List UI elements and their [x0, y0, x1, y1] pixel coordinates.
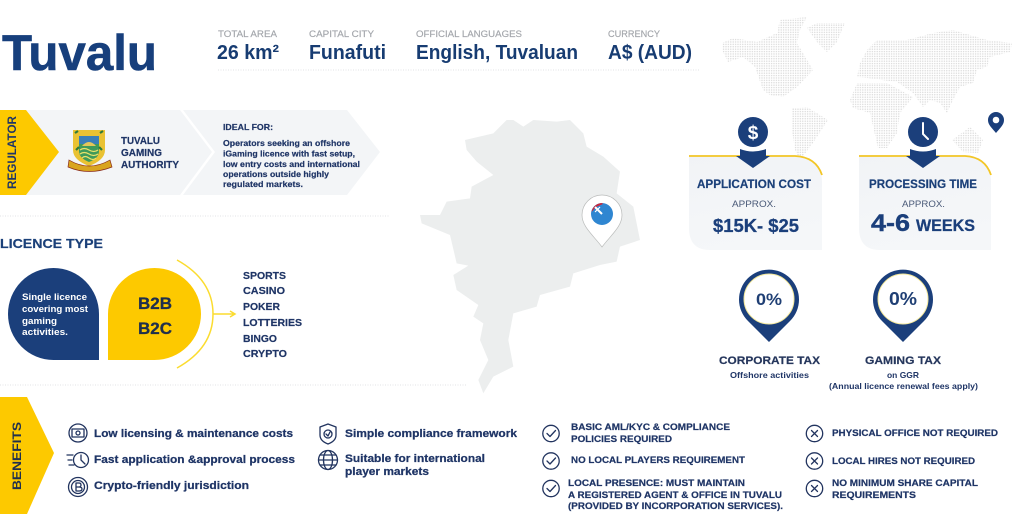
fact: official languages: [416, 29, 578, 64]
rate: 0%: [756, 290, 782, 309]
icon: globe: [318, 450, 338, 470]
approx label: APPROX.: [902, 199, 945, 210]
check icon: [543, 425, 559, 442]
requirement: AML KYC: POLICIES REQUIRED: [571, 434, 672, 445]
B2B B2C label: B2B: [138, 294, 172, 313]
benefit: low costs: Low licensing & maintenance costs: [94, 428, 293, 440]
requirement: local presence: (PROVIDED BY INCORPORATION SERVICES).: [568, 501, 783, 512]
benefit: compliance: Simple compliance framework: [345, 428, 518, 440]
cross icon: [806, 453, 823, 469]
fact: total area: 26 km²: [217, 42, 279, 64]
check icon: [543, 480, 559, 497]
activities list: POKER: [243, 301, 280, 313]
note: [829, 370, 978, 391]
note: on GGR: [887, 370, 919, 380]
benefit: crypto friendly: Crypto-friendly jurisdiction: [94, 480, 249, 492]
teardrop text: gaming: [22, 316, 57, 326]
item: physical office: PHYSICAL OFFICE NOT REQUIRED: [832, 428, 998, 439]
icon: flag map pin: [582, 195, 622, 247]
activities list: SPORTS: [243, 270, 286, 282]
fact: currency: [608, 29, 692, 64]
icon: bitcoin: [68, 478, 88, 496]
time value: WEEKS: [916, 216, 975, 235]
icon: clock: [908, 117, 938, 147]
item: local hires: LOCAL HIRES NOT REQUIRED: [832, 456, 975, 467]
fact: currency: CURRENCY: [608, 29, 660, 39]
activities list: [243, 270, 302, 360]
benefit: fast approval: Fast application &approval process: [94, 454, 295, 466]
requirements: required list: [543, 422, 783, 512]
icon: small location pin: [988, 112, 1004, 133]
ideal for text: low entry costs and international: [223, 159, 360, 169]
note: (Annual licence renewal fees apply): [829, 381, 978, 391]
fact: official languages: English, Tuvaluan: [416, 42, 578, 64]
arrow: down: [906, 149, 940, 168]
requirement: local players: NO LOCAL PLAYERS REQUIREMENT: [571, 455, 745, 466]
requirement: local presence: [568, 478, 783, 512]
ideal for text: regulated markets.: [223, 179, 303, 189]
benefits tab: [0, 397, 54, 514]
rate: 0%: [889, 289, 917, 309]
item: share capital: [832, 478, 978, 501]
card heading: PROCESSING TIME: [869, 179, 977, 191]
icon: Tuvalu coat of arms: [68, 130, 112, 172]
benefit: international markets: player markets: [345, 466, 429, 478]
panel: licence type: [8, 260, 302, 368]
panel: corporate tax: [719, 270, 821, 380]
benefit: international markets: [345, 453, 485, 478]
requirement: local presence: LOCAL PRESENCE: MUST MAINTAIN: [568, 478, 745, 489]
panel: processing time: [859, 117, 991, 250]
heading: licence type: LICENCE TYPE: [0, 236, 103, 251]
heading: GAMING TAX: [865, 355, 942, 367]
time value: 4-6: [871, 210, 910, 237]
fact: currency: A$ (AUD): [608, 42, 692, 64]
cost value: $15K- $25: [713, 215, 799, 236]
teardrop text: [22, 292, 88, 337]
ideal for text: IDEAL FOR:: [223, 122, 273, 132]
time value: [871, 210, 975, 237]
icon: fast clock: [67, 452, 88, 468]
panel: regulator: [0, 110, 380, 195]
activities list: BINGO: [243, 333, 277, 345]
dotted world map: [722, 17, 1012, 160]
panel: benefits: [0, 397, 518, 514]
authority name: TUVALU: [121, 135, 160, 147]
panel: gaming tax: [829, 270, 978, 391]
requirement: AML KYC: BASIC AML/KYC & COMPLIANCE: [571, 422, 730, 433]
fact: capital city: [309, 29, 386, 64]
yellow teardrop: [108, 268, 201, 360]
item: share capital: REQUIREMENTS: [832, 490, 916, 501]
item: share capital: NO MINIMUM SHARE CAPITAL: [832, 478, 978, 489]
fact: capital city: Funafuti: [309, 42, 386, 64]
requirements: not required list: [806, 425, 998, 501]
icon: money cycle: [69, 424, 87, 442]
requirement: local presence: A REGISTERED AGENT & OFFICE IN TUVALU: [568, 490, 782, 501]
icon: shield: [320, 424, 336, 444]
activities list: CASINO: [243, 285, 285, 297]
regulator tab: [0, 110, 59, 195]
ideal for text: [223, 122, 360, 189]
title: Tuvalu: [2, 25, 157, 81]
card heading: APPLICATION COST: [697, 179, 811, 191]
benefits label: BENEFITS: [10, 422, 24, 490]
B2B B2C label: [138, 294, 172, 338]
pin: [873, 270, 933, 342]
teardrop text: Single licence: [22, 292, 87, 302]
arrow: down: [736, 149, 770, 168]
note: Offshore activities: [730, 370, 809, 380]
icon: dollar coin: $: [748, 123, 759, 144]
authority name: AUTHORITY: [121, 159, 179, 171]
country map of Tuvalu region: [420, 120, 640, 393]
fact: capital city: CAPITAL CITY: [309, 29, 374, 39]
fact: total area: TOTAL AREA: [218, 29, 277, 39]
fact: total area: [217, 29, 279, 64]
authority name: GAMING: [121, 147, 162, 159]
benefit: international markets: Suitable for international: [345, 453, 485, 465]
authority name: [121, 135, 179, 171]
check icon: [543, 453, 559, 469]
teardrop text: covering most: [22, 304, 88, 314]
heading: CORPORATE TAX: [719, 355, 821, 367]
teardrop text: activities.: [22, 327, 68, 337]
cross icon: [806, 425, 823, 442]
activities list: CRYPTO: [243, 348, 287, 360]
ideal for text: Operators seeking an offshore: [223, 138, 350, 148]
pin: [739, 270, 799, 342]
panel: application cost: [689, 117, 822, 250]
activities list: LOTTERIES: [243, 317, 302, 329]
cross icon: [806, 480, 823, 497]
regulator label: REGULATOR: [7, 115, 19, 189]
ideal for text: operations outside highly: [223, 169, 329, 179]
blue teardrop: [8, 268, 99, 360]
approx label: APPROX.: [732, 199, 776, 210]
B2B B2C label: B2C: [138, 319, 172, 338]
arrow: arc to activities: [177, 260, 235, 368]
requirement: AML KYC: [571, 422, 730, 445]
ideal for text: iGaming licence with fast setup,: [223, 148, 355, 158]
fact: official languages: OFFICIAL LANGUAGES: [416, 29, 522, 39]
